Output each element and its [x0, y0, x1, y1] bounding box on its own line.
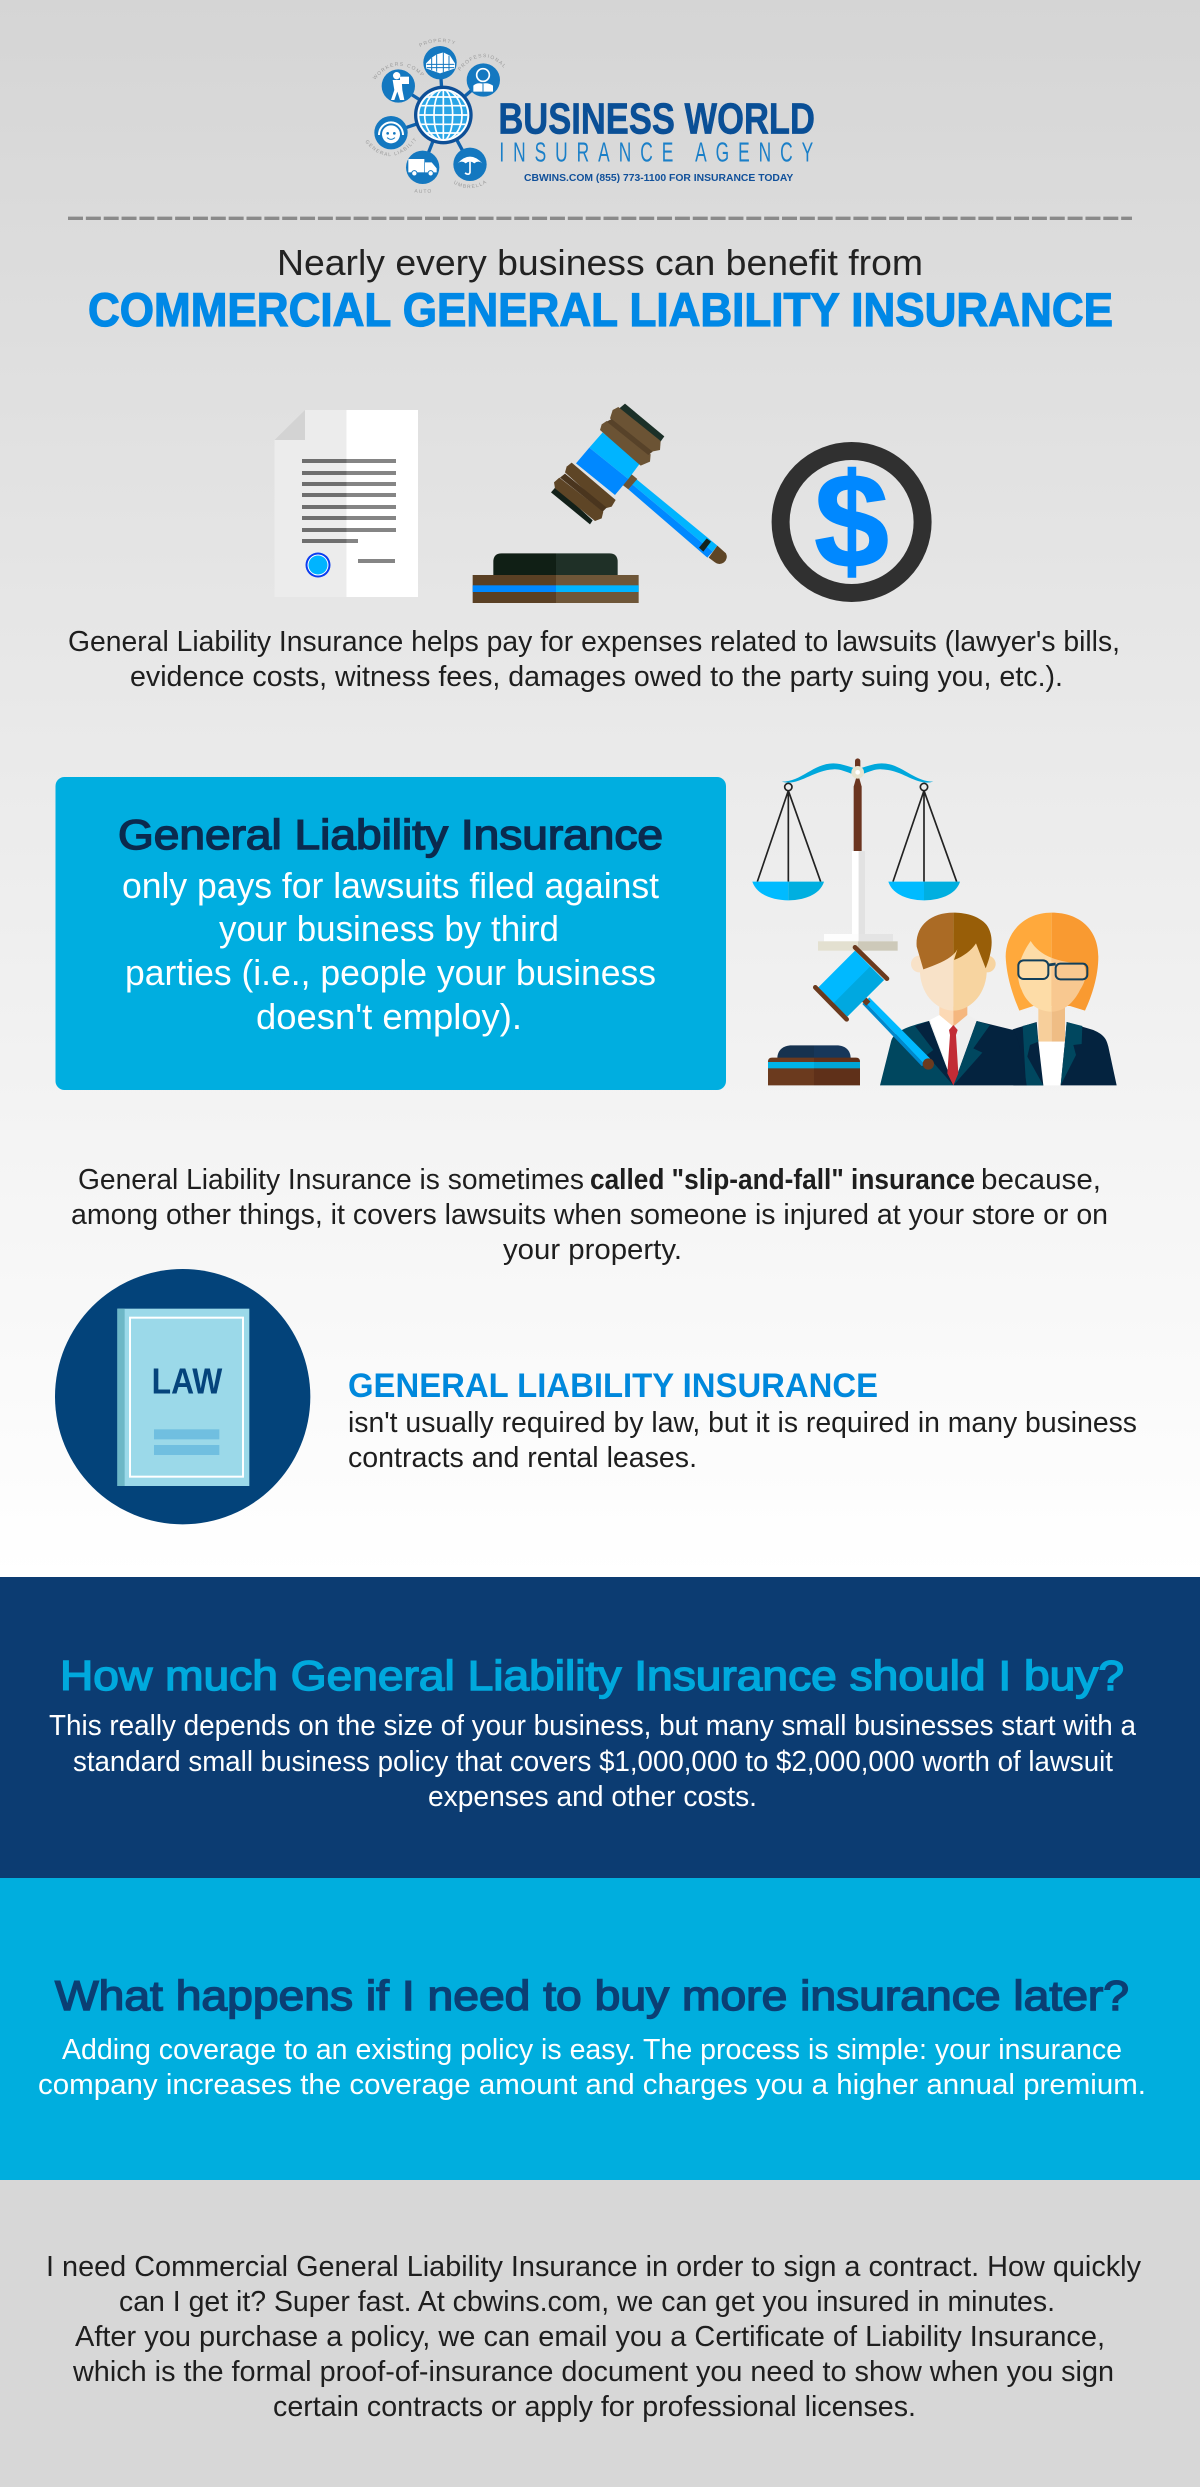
body text: which is the formal proof-of-insurance document you need to show when you sign: [72, 2356, 1114, 2388]
text: required by contracts: isn't usually required by law, but it is required in many business: [348, 1407, 1137, 1439]
title: Nearly every business can benefit from: [277, 242, 923, 283]
logo wordmark: CBWINS.COM (855) 773-1100 FOR INSURANCE TODAY: [524, 173, 793, 184]
icon: building: [426, 52, 455, 73]
text: what general liability pays for: [68, 626, 1120, 693]
body text: can I get it? Super fast. At cbwins.com, we can get you insured in minutes.: [119, 2286, 1055, 2318]
title: [88, 242, 1113, 336]
logo icon labels: PROFESSIONAL: [458, 54, 505, 71]
text: required by contracts: [348, 1367, 1137, 1474]
scales of justice: [752, 758, 960, 951]
body text: company increases the coverage amount and charges you a higher annual premium.: [38, 2069, 1146, 2101]
text: slip-and-fall: called "slip-and-fall" insurance: [590, 1164, 975, 1196]
panel text: your business by third: [219, 908, 559, 949]
panel: buying more later: [0, 1878, 1200, 2180]
small gavel: [768, 947, 934, 1085]
heading: How much General Liability Insurance should I buy?: [60, 1652, 1124, 1699]
text: what general liability pays for: evidence costs, witness fees, damages owed to the party suing you, etc.).: [130, 661, 1063, 693]
gavel block: [473, 553, 639, 603]
icon: dollar coin: $: [814, 447, 889, 596]
panel: how much to buy: [0, 1577, 1200, 1878]
dashed divider: [68, 217, 1132, 220]
panel heading: General Liability Insurance: [118, 811, 663, 858]
gavel handle: [623, 474, 727, 564]
logo icon labels: [366, 38, 505, 193]
logo icon labels: PROPERTY: [419, 38, 456, 47]
body text: I need Commercial General Liability Insurance in order to sign a contract. How quickly: [46, 2251, 1142, 2283]
logo icon labels: UMBRELLA: [454, 180, 486, 188]
panel text: only pays for lawsuits filed against: [122, 865, 659, 906]
logo wordmark: [498, 94, 815, 184]
logo network icon: [366, 38, 505, 193]
logo wordmark: BUSINESS WORLD: [498, 94, 815, 143]
icon: worker: [391, 72, 409, 100]
logo icon labels: WORKERS COMP: [372, 62, 424, 79]
panel: how quickly: [0, 2180, 1200, 2487]
body text: expenses and other costs.: [428, 1781, 757, 1813]
icon: professional: [473, 69, 493, 92]
icon: umbrella: [458, 157, 482, 174]
icon: truck: [408, 159, 437, 176]
panel text: parties (i.e., people your business: [125, 952, 656, 993]
woman: [1006, 913, 1117, 1085]
text: slip-and-fall: [71, 1164, 1108, 1266]
body text: [49, 1710, 1136, 1813]
panel text: doesn't employ).: [256, 996, 522, 1037]
panel: third parties: [56, 777, 726, 1090]
gavel head: [551, 404, 664, 524]
background: [0, 0, 1200, 1577]
man: [880, 913, 1027, 1085]
body text: This really depends on the size of your business, but many small businesses start with a: [49, 1710, 1136, 1742]
body text: [46, 2251, 1142, 2423]
body text: [38, 2034, 1146, 2101]
body text: After you purchase a policy, we can email you a Certificate of Liability Insurance,: [75, 2321, 1105, 2353]
icon: law book: [55, 1269, 310, 1524]
panel text: [122, 865, 659, 1037]
illustration: scales, gavel and business people: [752, 758, 1117, 1085]
body text: Adding coverage to an existing policy is easy. The process is simple: your insurance: [62, 2034, 1122, 2066]
text: required by contracts: GENERAL LIABILITY INSURANCE: [348, 1367, 878, 1405]
logo icon labels: AUTO: [414, 189, 431, 193]
logo wordmark: INSURANCE AGENCY: [499, 136, 814, 168]
text: slip-and-fall: because,: [981, 1164, 1101, 1196]
logo: Business World Insurance Agency: [366, 38, 815, 193]
text: required by contracts: contracts and rental leases.: [348, 1442, 697, 1474]
body text: standard small business policy that covers $1,000,000 to $2,000,000 worth of lawsuit: [73, 1746, 1113, 1778]
text: slip-and-fall: among other things, it covers lawsuits when someone is injured at your store or on: [71, 1199, 1108, 1231]
title: COMMERCIAL GENERAL LIABILITY INSURANCE: [88, 283, 1113, 336]
icon: gavel: [473, 404, 727, 603]
logo icon labels: GENERAL LIABILITY: [366, 138, 416, 156]
body text: certain contracts or apply for professional licenses.: [273, 2391, 916, 2423]
text: slip-and-fall: your property.: [503, 1234, 682, 1266]
icon: law book: LAW: [152, 1360, 222, 1401]
icon: dollar coin: [781, 447, 923, 596]
icon: headset: [379, 122, 403, 143]
text: what general liability pays for: General Liability Insurance helps pay for expenses related to lawsuits (lawyer's bills,: [68, 626, 1120, 658]
icon: document: [274, 410, 418, 597]
text: slip-and-fall: General Liability Insurance is sometimes: [78, 1164, 584, 1196]
heading: What happens if I need to buy more insurance later?: [55, 1972, 1129, 2019]
